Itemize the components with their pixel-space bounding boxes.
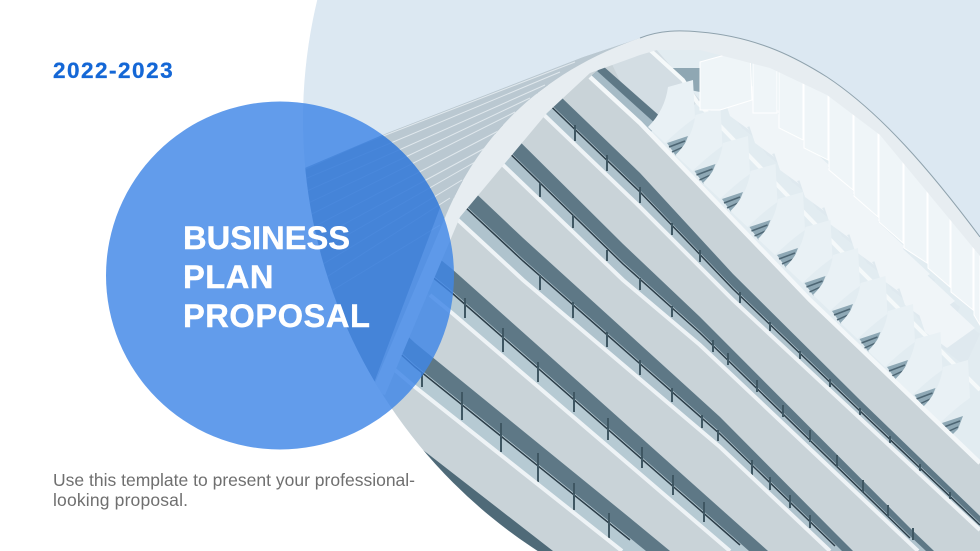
vertical fins: [700, 48, 980, 325]
photo: building inside large circle: [300, 0, 980, 551]
description text: Use this template to present your professional-: [53, 470, 415, 490]
facade with window bands: [372, 30, 980, 551]
ledge behind fins: [650, 50, 980, 390]
description text: [53, 470, 415, 510]
stepped fin undersides: [728, 86, 974, 348]
date heading: 2022-2023: [53, 58, 174, 83]
roof shade under blue circle: [305, 135, 440, 381]
leaf shaped fins: [648, 80, 970, 436]
window band 5: [402, 338, 670, 551]
upper concrete and glass near crown: [590, 48, 700, 133]
curved ribbed roof: [382, 41, 631, 219]
description text: looking proposal.: [53, 490, 188, 510]
window band 2: [495, 117, 934, 551]
title: [183, 219, 370, 334]
window band 6 at circle edge: [423, 450, 553, 551]
rim dark top edge: [640, 31, 980, 237]
blue translucent circle: [106, 102, 454, 450]
fin area base: [640, 40, 980, 463]
sky background: [303, 0, 980, 448]
main ledge under fins: [590, 77, 980, 463]
title: PLAN: [183, 258, 274, 295]
curved white rim: [372, 31, 980, 395]
title: PROPOSAL: [183, 297, 370, 334]
white ledges: [395, 113, 980, 551]
title: BUSINESS: [183, 219, 350, 256]
window band 1: [535, 72, 980, 530]
window band 4: [425, 247, 768, 551]
window band 3: [450, 169, 853, 551]
